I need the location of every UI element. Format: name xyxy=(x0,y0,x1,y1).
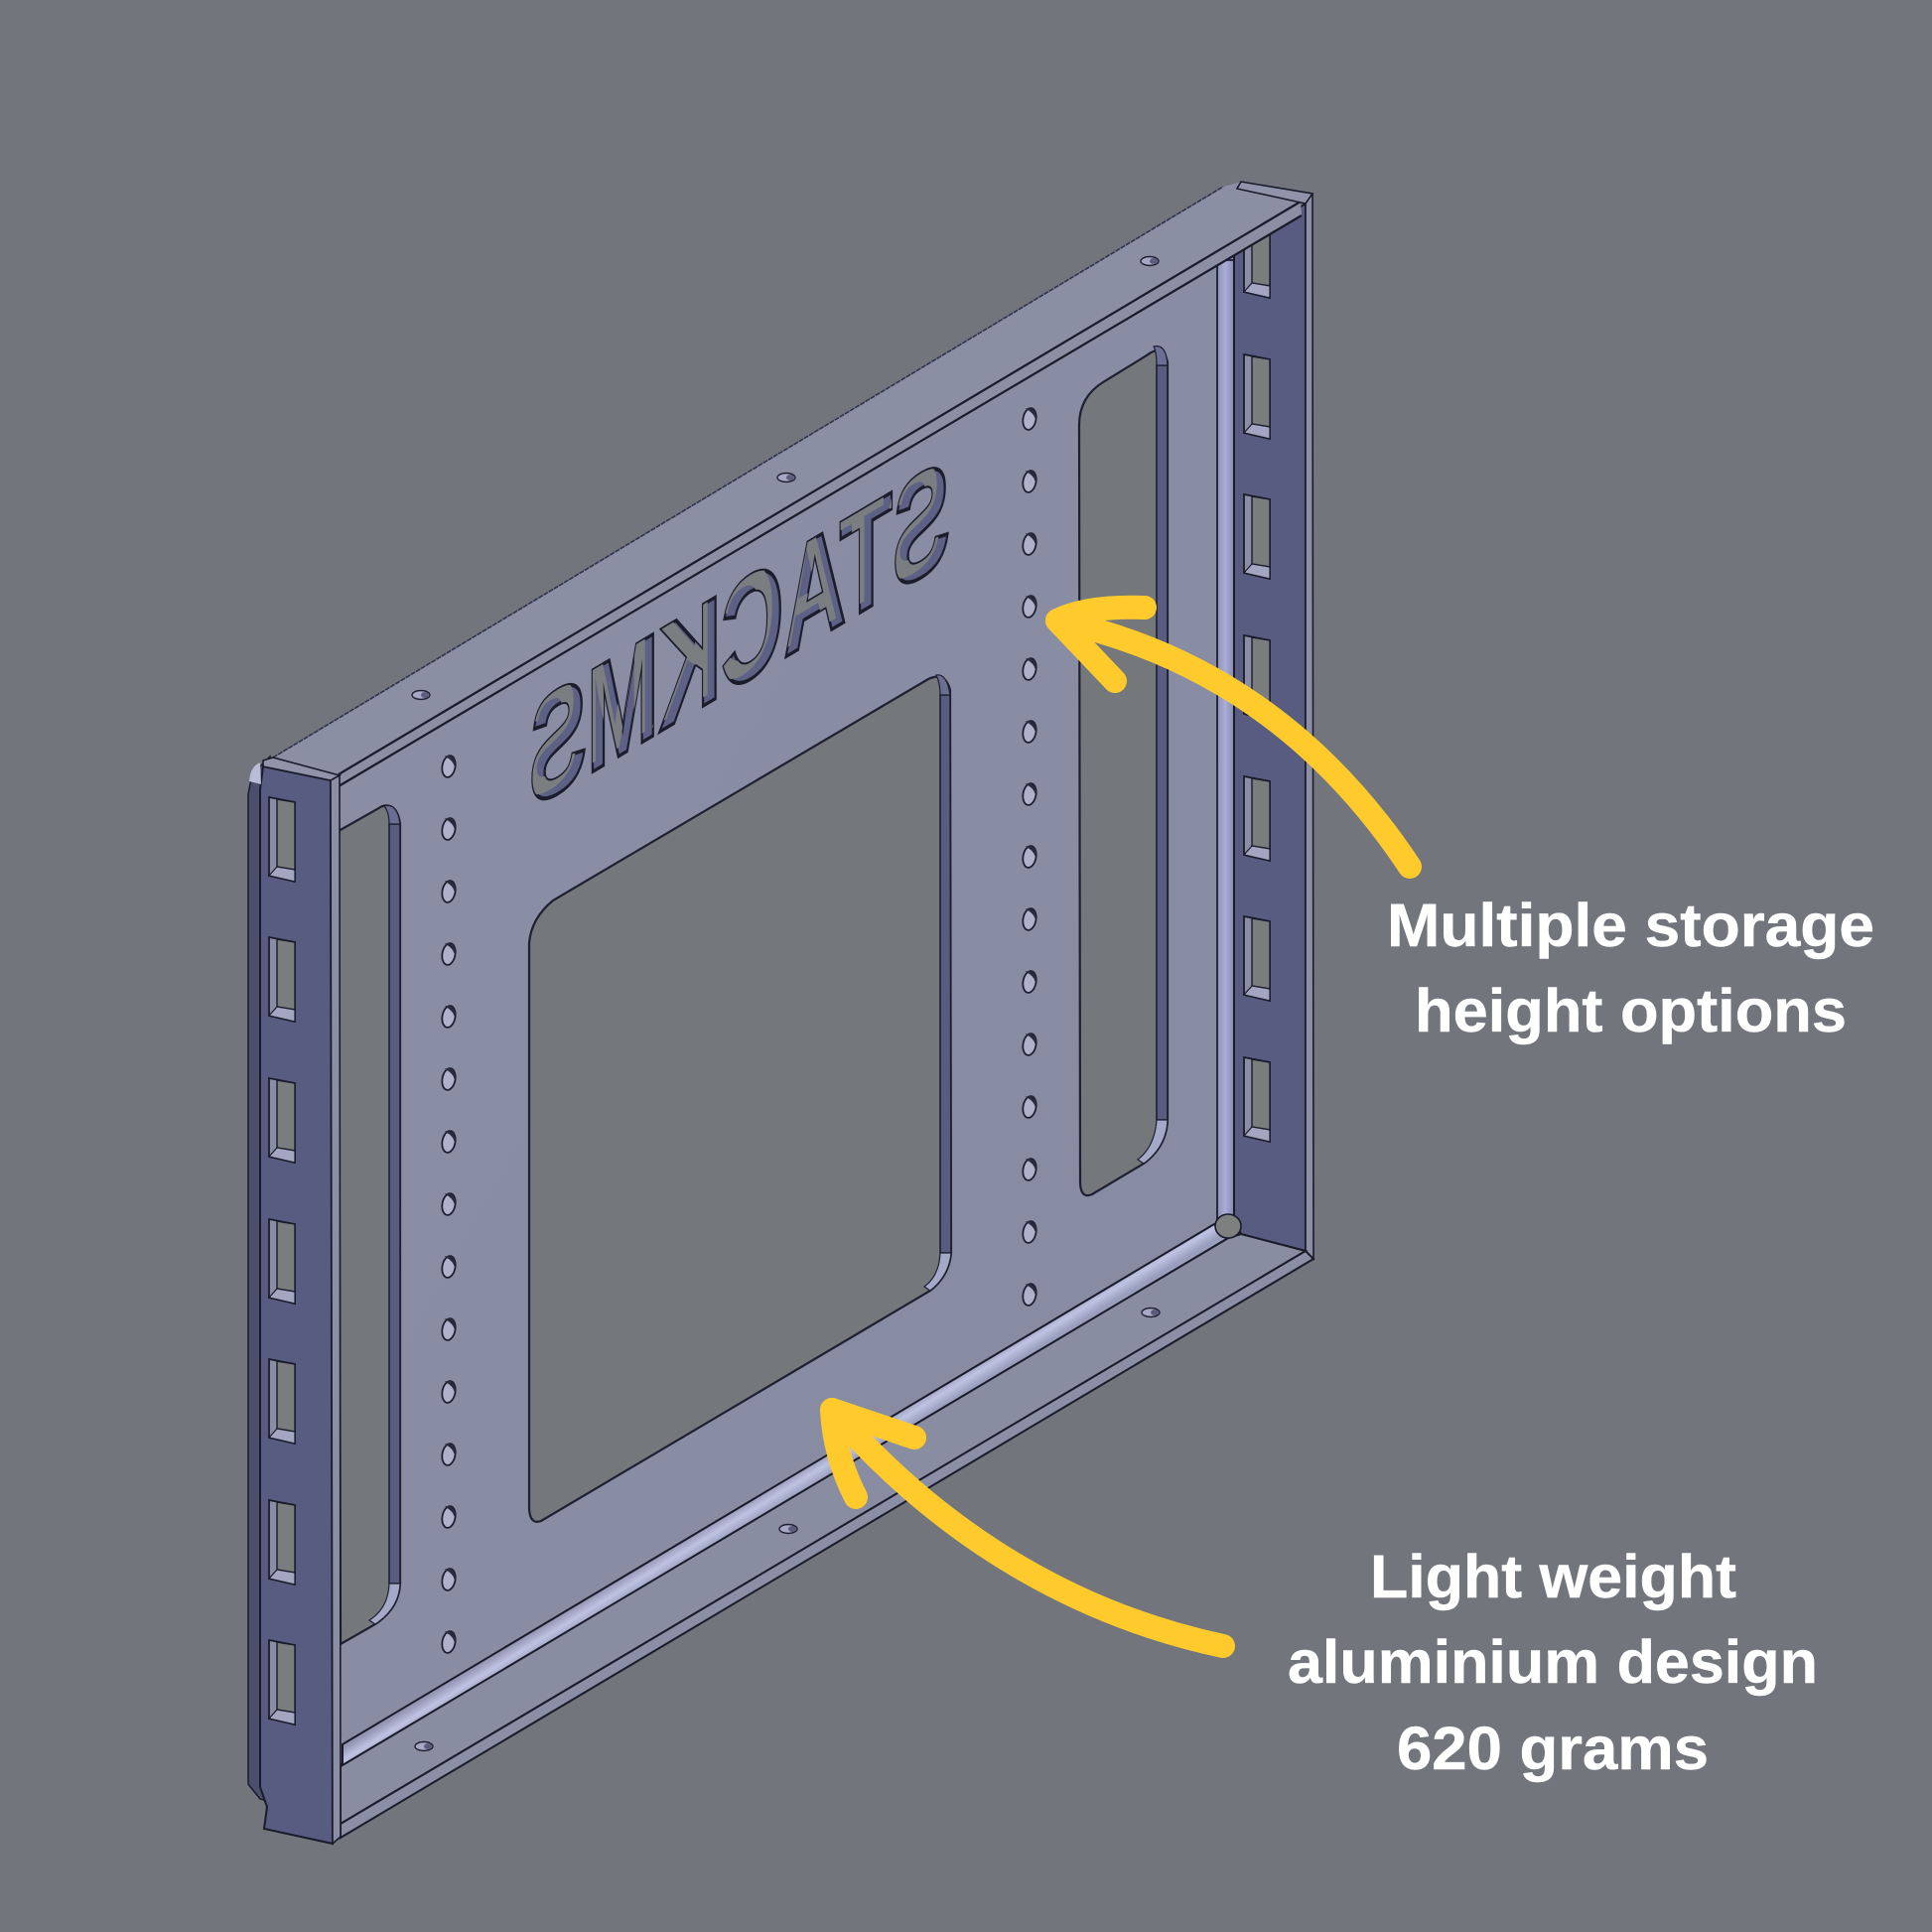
mirrored STACKMS cut-out lettering: STACKMS xyxy=(529,427,950,842)
top flange xyxy=(270,182,1312,786)
right window xyxy=(1079,350,1168,1195)
callout: storage height: height options xyxy=(1415,977,1847,1044)
callout: weight xyxy=(1288,1543,1818,1782)
right vertical bend xyxy=(1217,260,1235,1228)
callout: storage height: Multiple storage xyxy=(1387,892,1874,959)
callout: storage height xyxy=(1387,892,1874,1044)
left outer side strip xyxy=(248,757,270,1802)
arrow: to aluminium frame xyxy=(832,1410,1223,1646)
callout: weight: 620 grams xyxy=(1397,1715,1709,1782)
callout: weight: Light weight xyxy=(1370,1543,1736,1610)
right column of adjustment holes xyxy=(1022,407,1037,1307)
bottom flange xyxy=(341,1214,1313,1838)
callout: weight: aluminium design xyxy=(1288,1628,1818,1696)
aluminium storage frame xyxy=(248,182,1313,1844)
mirrored STACKMS cut-out lettering: STACKMS xyxy=(521,423,942,838)
mirrored STACKMS cut-out lettering xyxy=(531,467,949,800)
back plate with cut-out windows xyxy=(339,256,1234,1767)
arrow: to height adjustment holes xyxy=(1057,608,1410,867)
left window xyxy=(339,805,400,1644)
left post xyxy=(249,758,341,1844)
right post xyxy=(1234,194,1313,1259)
centre window xyxy=(529,677,951,1522)
left column of adjustment holes xyxy=(441,755,457,1654)
